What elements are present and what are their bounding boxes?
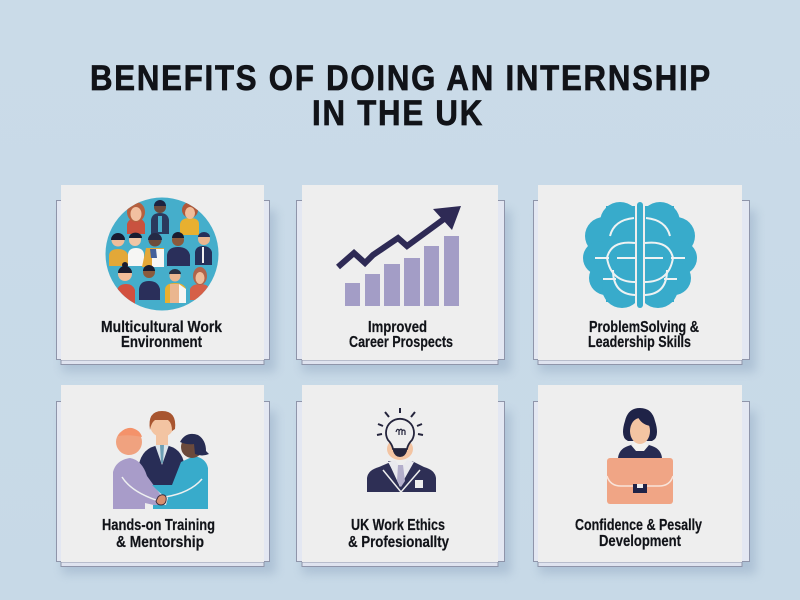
label: hands-on training and mentorship bbox=[102, 517, 215, 551]
icon: growth chart with arrow bbox=[338, 206, 461, 306]
label: problem solving and leadership skills: Leadership Skills bbox=[588, 334, 691, 351]
label: multicultural work environment: Environment bbox=[121, 334, 202, 351]
label: uk work ethics and professionality: UK Work Ethics bbox=[351, 517, 445, 534]
label: improved career prospects: Career Prospects bbox=[349, 334, 453, 351]
panel: hands-on training and mentorship bbox=[56, 385, 276, 574]
label: confidence and personal development: Confidence & Pesally bbox=[575, 517, 702, 534]
icon: person with briefcase bbox=[607, 408, 673, 504]
icon: diverse team circle bbox=[106, 198, 218, 310]
panel: confidence and personal development bbox=[534, 385, 756, 574]
label: problem solving and leadership skills: ProblemSolving & bbox=[589, 319, 699, 336]
label: problem solving and leadership skills bbox=[588, 319, 699, 351]
title: BENEFITS OF DOING AN INTERNSHIP bbox=[90, 59, 712, 98]
label: multicultural work environment bbox=[101, 319, 222, 351]
icon: brain bbox=[583, 198, 697, 312]
label: improved career prospects: Improved bbox=[368, 319, 427, 336]
panel: uk work ethics and professionality bbox=[296, 385, 511, 574]
label: uk work ethics and professionality: & Profesionallty bbox=[348, 534, 449, 551]
title: IN THE UK bbox=[312, 94, 484, 133]
icon: lightbulb-headed professional bbox=[367, 408, 436, 492]
panel: multicultural work environment bbox=[56, 185, 276, 372]
label: multicultural work environment: Multicultural Work bbox=[101, 319, 222, 336]
panel: improved career prospects bbox=[296, 185, 511, 372]
label: confidence and personal development bbox=[575, 517, 702, 550]
title bbox=[90, 59, 712, 133]
label: hands-on training and mentorship: Hands-on Training bbox=[102, 517, 215, 534]
label: improved career prospects bbox=[349, 319, 453, 351]
icon: three people shaking hands bbox=[113, 411, 209, 509]
label: hands-on training and mentorship: & Mentorship bbox=[116, 534, 204, 551]
panel: problem solving and leadership skills bbox=[534, 185, 756, 372]
label: uk work ethics and professionality bbox=[348, 517, 449, 551]
label: confidence and personal development: Development bbox=[599, 533, 681, 550]
